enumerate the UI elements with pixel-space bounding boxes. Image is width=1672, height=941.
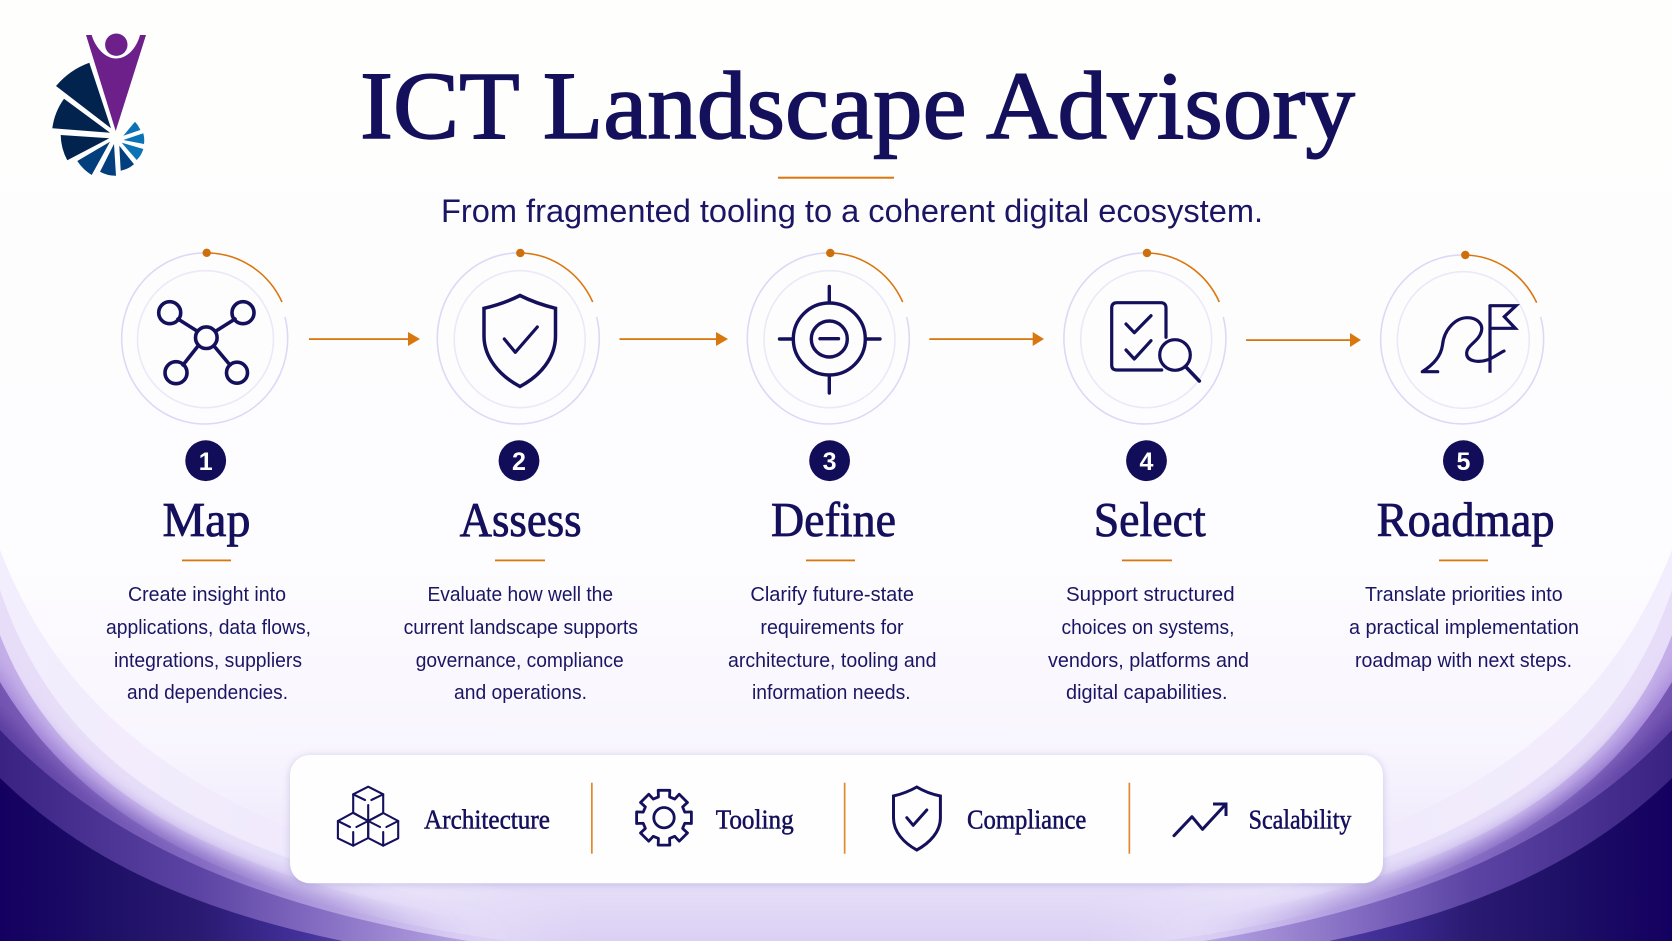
description 4: digital capabilities. [1066,681,1228,704]
heading: Select: Select [1094,492,1206,547]
description 5: a practical implementation [1349,616,1579,639]
rule 5 [1439,560,1488,561]
description 3: Clarify future-state [750,583,914,606]
step 5: Roadmap [1349,251,1579,672]
step 3: Define [728,249,936,704]
icon: winding road and flag [1422,305,1516,373]
number badge 3 [809,440,850,481]
dividers [591,783,1130,854]
number badge 4 [1126,440,1167,481]
icon: network nodes [159,302,254,384]
step 2: Assess [404,249,638,704]
step 1: Map [106,249,311,704]
description 1: integrations, suppliers [114,649,302,672]
description 1 [106,583,311,704]
icon: stacked cubes [338,787,398,846]
progress ring 3 [747,249,909,424]
label: Scalability: Scalability [1249,804,1352,834]
description 2 [404,583,638,704]
label: Compliance: Compliance [967,804,1086,834]
title: ICT Landscape Advisory [360,52,1355,159]
progress ring 4 [1064,249,1226,424]
heading: Roadmap: Roadmap [1377,492,1555,547]
rule 2 [495,560,545,561]
description 4: Support structured [1066,583,1235,606]
number badge 3: 3 [823,448,837,476]
logo [52,34,146,176]
description 5 [1349,583,1579,672]
progress ring 2 [437,249,599,424]
number badge 1: 1 [199,448,213,476]
step 4: Select [1048,249,1249,704]
subtitle: From fragmented tooling to a coherent digital ecosystem. [441,193,1263,229]
heading: Map: Map [162,492,250,547]
icon: checklist and magnifier [1112,303,1199,381]
rule 4 [1122,560,1172,561]
icon: trend arrow [1174,804,1226,836]
rule 3 [806,560,855,561]
label: Tooling: Tooling [716,804,794,834]
description 2: governance, compliance [416,649,624,672]
icon: shield check [484,296,556,386]
description 3 [728,583,936,704]
description 1: and dependencies. [127,681,288,704]
description 3: requirements for [760,616,904,639]
number badge 1 [185,440,226,481]
number badge 5: 5 [1456,448,1470,476]
icon: gear [637,790,691,845]
number badge 5 [1443,440,1484,481]
number badge 2 [499,440,539,481]
description 2: and operations. [454,681,587,704]
description 3: information needs. [752,681,911,704]
description 1: Create insight into [128,583,286,606]
panel: capabilities card [290,755,1383,883]
description 4 [1048,583,1249,704]
heading: Define: Define [771,492,896,547]
description 5: roadmap with next steps. [1355,649,1572,672]
title rule [778,177,894,179]
icon: target [780,286,880,393]
arrow 4 to 5 [1246,333,1361,347]
arrow 3 to 4 [929,332,1044,346]
description 3: architecture, tooling and [728,649,936,672]
number badge 2: 2 [512,448,526,476]
description 4: vendors, platforms and [1048,649,1249,672]
icon: compliance shield [894,787,940,850]
number badge 4: 4 [1140,448,1154,476]
rule 1 [182,560,231,561]
description 5: Translate priorities into [1365,583,1563,606]
progress ring 1 [122,249,288,424]
progress ring 5 [1381,251,1544,424]
label: Architecture: Architecture [424,804,550,834]
arrow 2 to 3 [620,332,728,346]
description 2: Evaluate how well the [428,583,613,606]
heading: Assess: Assess [460,492,582,547]
description 2: current landscape supports [404,616,638,639]
arrow 1 to 2 [309,332,420,346]
description 4: choices on systems, [1062,616,1234,639]
description 1: applications, data flows, [106,616,311,639]
